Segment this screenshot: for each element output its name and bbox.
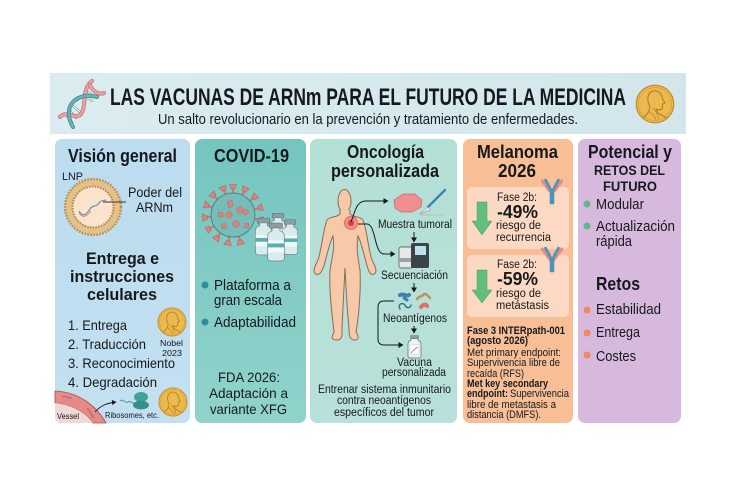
icon: antibody [542, 248, 562, 271]
label: vacuna personalizada: personalizada [382, 367, 447, 379]
label: vacuna personalizada: Vacuna [397, 357, 433, 369]
heading: entrega e instrucciones celulares: celulares [87, 285, 157, 304]
text: objetivo [318, 384, 451, 419]
list: retos: Estabilidad [596, 302, 661, 318]
text: -49% recurrencia: recurrencia [496, 232, 552, 244]
icon: vaccine vials [255, 213, 298, 261]
text: fase 3 INTERpath-001: endpoint: [467, 388, 508, 400]
label: ribosomes: Ribosomes, etc. [105, 411, 159, 420]
text: -49% recurrencia: riesgo de [496, 220, 541, 232]
arrow: sequencing to neoantigens [413, 283, 415, 292]
text: -59% metástasis: metástasis [496, 300, 549, 312]
panel: melanoma 2026 [463, 139, 573, 423]
heading: melanoma 2026: Melanoma [477, 142, 559, 162]
icon: tumor sample [394, 194, 422, 212]
arrow: neoantigens to vaccine [413, 326, 415, 333]
text: fase 3 INTERpath-001: distancia (DMFS). [467, 409, 541, 421]
icon: neoantigens [399, 294, 430, 309]
bullet list [202, 278, 296, 331]
subtitle: Un salto revolucionario en la prevención y tratamiento de enfermedades. [158, 111, 578, 128]
text: -59% metástasis: Fase 2b: [497, 259, 537, 271]
heading: covid-19: COVID-19 [214, 146, 289, 166]
heading: entrega e instrucciones celulares: instrucciones [70, 267, 174, 286]
icon: DNA helix [60, 81, 104, 127]
heading: oncología personalizada: personalizada [331, 161, 440, 181]
arrow: tumor to sample [351, 201, 388, 222]
text: fase 3 INTERpath-001: Fase 3 INTERpath-001 [467, 325, 565, 337]
label: Nobel 2023 [160, 338, 183, 358]
text: fase 3 INTERpath-001: Supervivencia [510, 388, 569, 400]
text: -49% recurrencia [496, 192, 552, 244]
text: fase 3 INTERpath-001: Met key secondary [467, 378, 548, 390]
panel: oncología personalizada [310, 139, 457, 423]
list: potencial [584, 197, 675, 250]
heading: entrega e instrucciones celulares: Entrega e [86, 249, 159, 268]
label: vacuna personalizada [382, 357, 447, 379]
text: objetivo: específicos del tumor [334, 407, 434, 419]
label: poder del ARNm: Poder del [128, 185, 182, 200]
text: -59% metástasis [496, 259, 549, 312]
text: fase 3 INTERpath-001: libre de metastasis a [467, 399, 556, 411]
label: vessel: Vessel [57, 412, 79, 421]
heading: entrega e instrucciones celulares [70, 249, 174, 304]
icon: antibody [542, 180, 562, 203]
card: metástasis [467, 248, 569, 317]
text: -59% metástasis: riesgo de [496, 288, 541, 300]
text: fase 3 INTERpath-001: Supervivencia libre de [467, 357, 560, 369]
card: recurrencia [467, 180, 569, 249]
numbered list: 4. Degradación [68, 374, 157, 390]
arrow: sample to sequencing [413, 232, 415, 242]
text: objetivo: Entrenar sistema inmunitario [318, 384, 451, 396]
text: FDA 2026 [209, 369, 288, 417]
label: poder del ARNm: ARNm [136, 200, 173, 215]
list: retos: Entrega [596, 325, 641, 341]
label: Nobel 2023: 2023 [162, 348, 182, 358]
text: FDA 2026: Adaptación a [209, 385, 288, 401]
label: neoantígenos: Neoantígenos [383, 313, 447, 325]
panel: covid-19 [195, 139, 306, 423]
list: retos [584, 302, 661, 365]
bullet list: gran escala [214, 293, 283, 309]
icon: coronavirus [202, 184, 264, 246]
arrow: vessel to ribosome [95, 402, 116, 412]
text: -59% metástasis: -59% [497, 268, 538, 289]
icon: Nobel medal [636, 85, 674, 123]
label: secuenciación: Secuenciación [381, 270, 448, 282]
icon: Nobel medal 2023 [158, 308, 186, 336]
heading: retos: Retos [596, 274, 640, 294]
list: potencial: Modular [596, 197, 644, 213]
icon: lipid nanoparticle with mRNA [65, 179, 126, 235]
heading: potencial y retos del futuro: Potencial y [588, 142, 672, 162]
text: fase 3 INTERpath-001 [467, 325, 569, 421]
text: objetivo: contra neoantígenos [337, 395, 431, 407]
heading: melanoma 2026 [477, 142, 559, 181]
arrow: tumor to sequencer [358, 224, 395, 254]
icon: down arrow [472, 202, 492, 235]
heading: melanoma 2026: 2026 [498, 161, 536, 181]
heading: visión general: Visión general [68, 145, 177, 166]
panel: potencial y retos [578, 139, 681, 423]
icon: ribosome with mRNA [120, 392, 149, 410]
heading: oncología personalizada [331, 142, 440, 181]
heading: potencial y retos del futuro: FUTURO [603, 179, 657, 194]
text: FDA 2026: FDA 2026: [218, 369, 280, 385]
text: fase 3 INTERpath-001: Met primary endpoint: [467, 347, 561, 359]
text: fase 3 INTERpath-001: recaída (RFS) [467, 368, 524, 380]
icon: personalized vaccine vial [408, 335, 421, 358]
label: Nobel 2023: Nobel [160, 338, 183, 348]
bullet list: Plataforma a [214, 278, 292, 294]
list: potencial: Actualización [596, 219, 675, 235]
label: LNP: LNP [62, 171, 83, 183]
label: muestra tumoral: Muestra tumoral [378, 219, 452, 231]
icon: scalpel [419, 190, 445, 215]
heading: oncología personalizada: Oncología [347, 142, 425, 162]
numbered list: 1. Entrega [68, 317, 127, 333]
text: -49% recurrencia: Fase 2b: [497, 192, 537, 204]
numbered list: 2. Traducción [68, 336, 146, 352]
heading: potencial y retos del futuro: RETOS DEL [594, 163, 665, 178]
numbered list: 3. Reconocimiento [68, 355, 175, 371]
list: potencial: rápida [596, 234, 633, 250]
icon: down arrow [472, 270, 492, 303]
text: -49% recurrencia: -49% [497, 201, 538, 222]
list: retos: Costes [596, 349, 636, 365]
numbered list [68, 317, 175, 390]
icon: Nobel medal lower [159, 388, 187, 416]
arrow: feedback bracket [378, 301, 403, 345]
bullet list: Adaptabilidad [214, 315, 296, 331]
label: poder del ARNm [128, 185, 182, 215]
panel: visión general [55, 139, 190, 423]
icon: human body [314, 190, 376, 340]
header banner [50, 73, 686, 134]
icon: sequencer [399, 243, 429, 268]
heading: potencial y retos del futuro [588, 142, 672, 194]
icon: blood vessel [55, 391, 106, 423]
text: fase 3 INTERpath-001: (agosto 2026) [467, 335, 528, 347]
text: FDA 2026: variante XFG [210, 401, 287, 417]
